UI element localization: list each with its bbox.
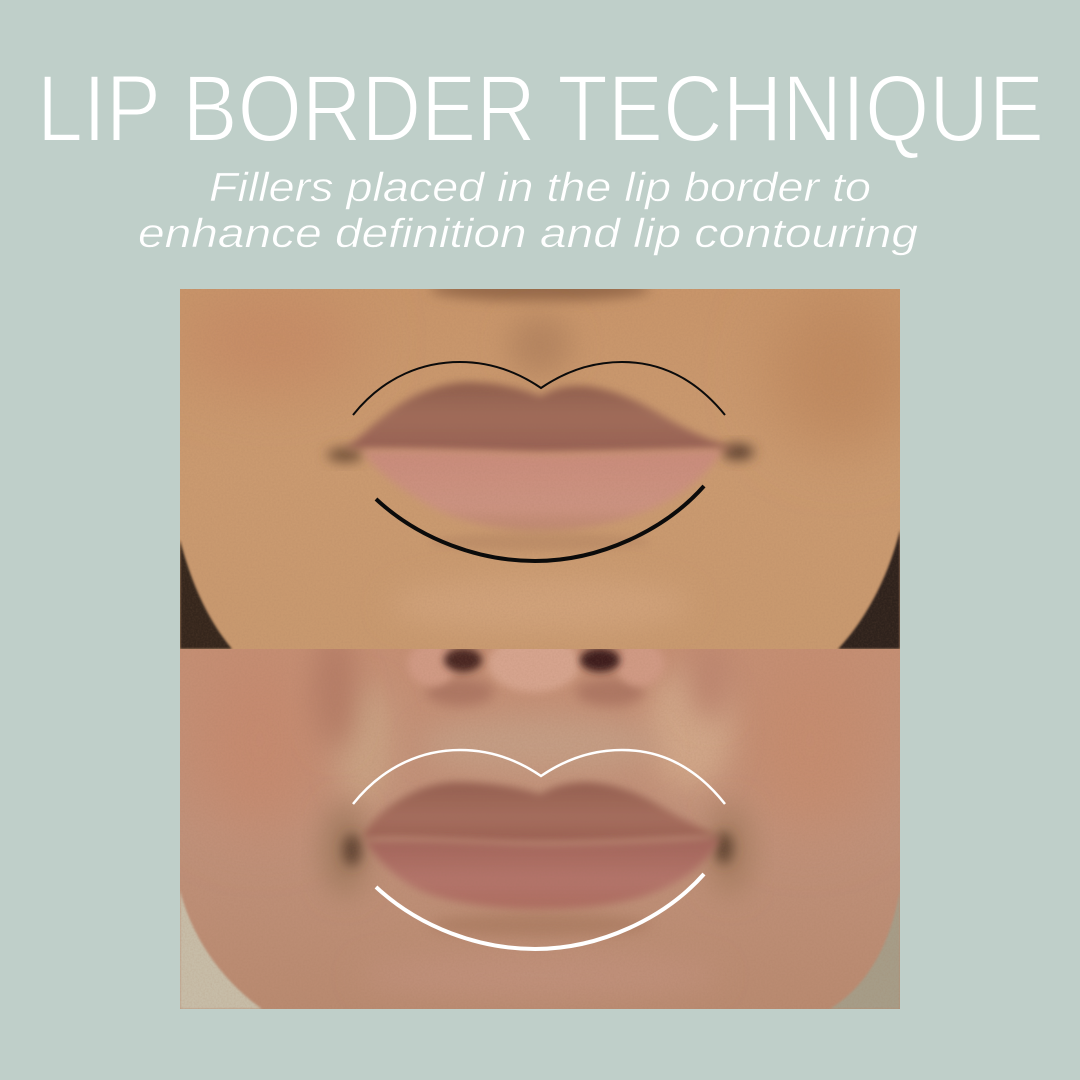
- subtitle: enhance definition and lip contouring: [138, 210, 918, 256]
- lower lip: [362, 450, 722, 531]
- upper lip: [362, 782, 720, 842]
- dark background corners: [180, 530, 900, 649]
- skin shading: [190, 630, 880, 997]
- panel: after photo with white lip outline: [180, 630, 900, 1009]
- lip outline: before upper: [353, 362, 725, 415]
- lower lip: [365, 838, 720, 909]
- mouth corners: [343, 832, 733, 866]
- upper lip: [345, 382, 738, 453]
- chin shadow below lip: [446, 536, 636, 549]
- subtitle: [138, 164, 918, 256]
- mouth corners: [327, 444, 754, 462]
- subtitle: Fillers placed in the lip border to: [209, 164, 871, 210]
- skin shading: [180, 277, 910, 633]
- panel: before photo with black lip outline: [180, 277, 910, 649]
- skin texture: [180, 289, 900, 1009]
- icon: nose and nostrils: [408, 649, 663, 709]
- background corners: [180, 890, 900, 1009]
- lip outline: before lower: [376, 486, 704, 561]
- lip outline: after upper: [353, 750, 725, 804]
- lip outline: after lower: [376, 874, 704, 949]
